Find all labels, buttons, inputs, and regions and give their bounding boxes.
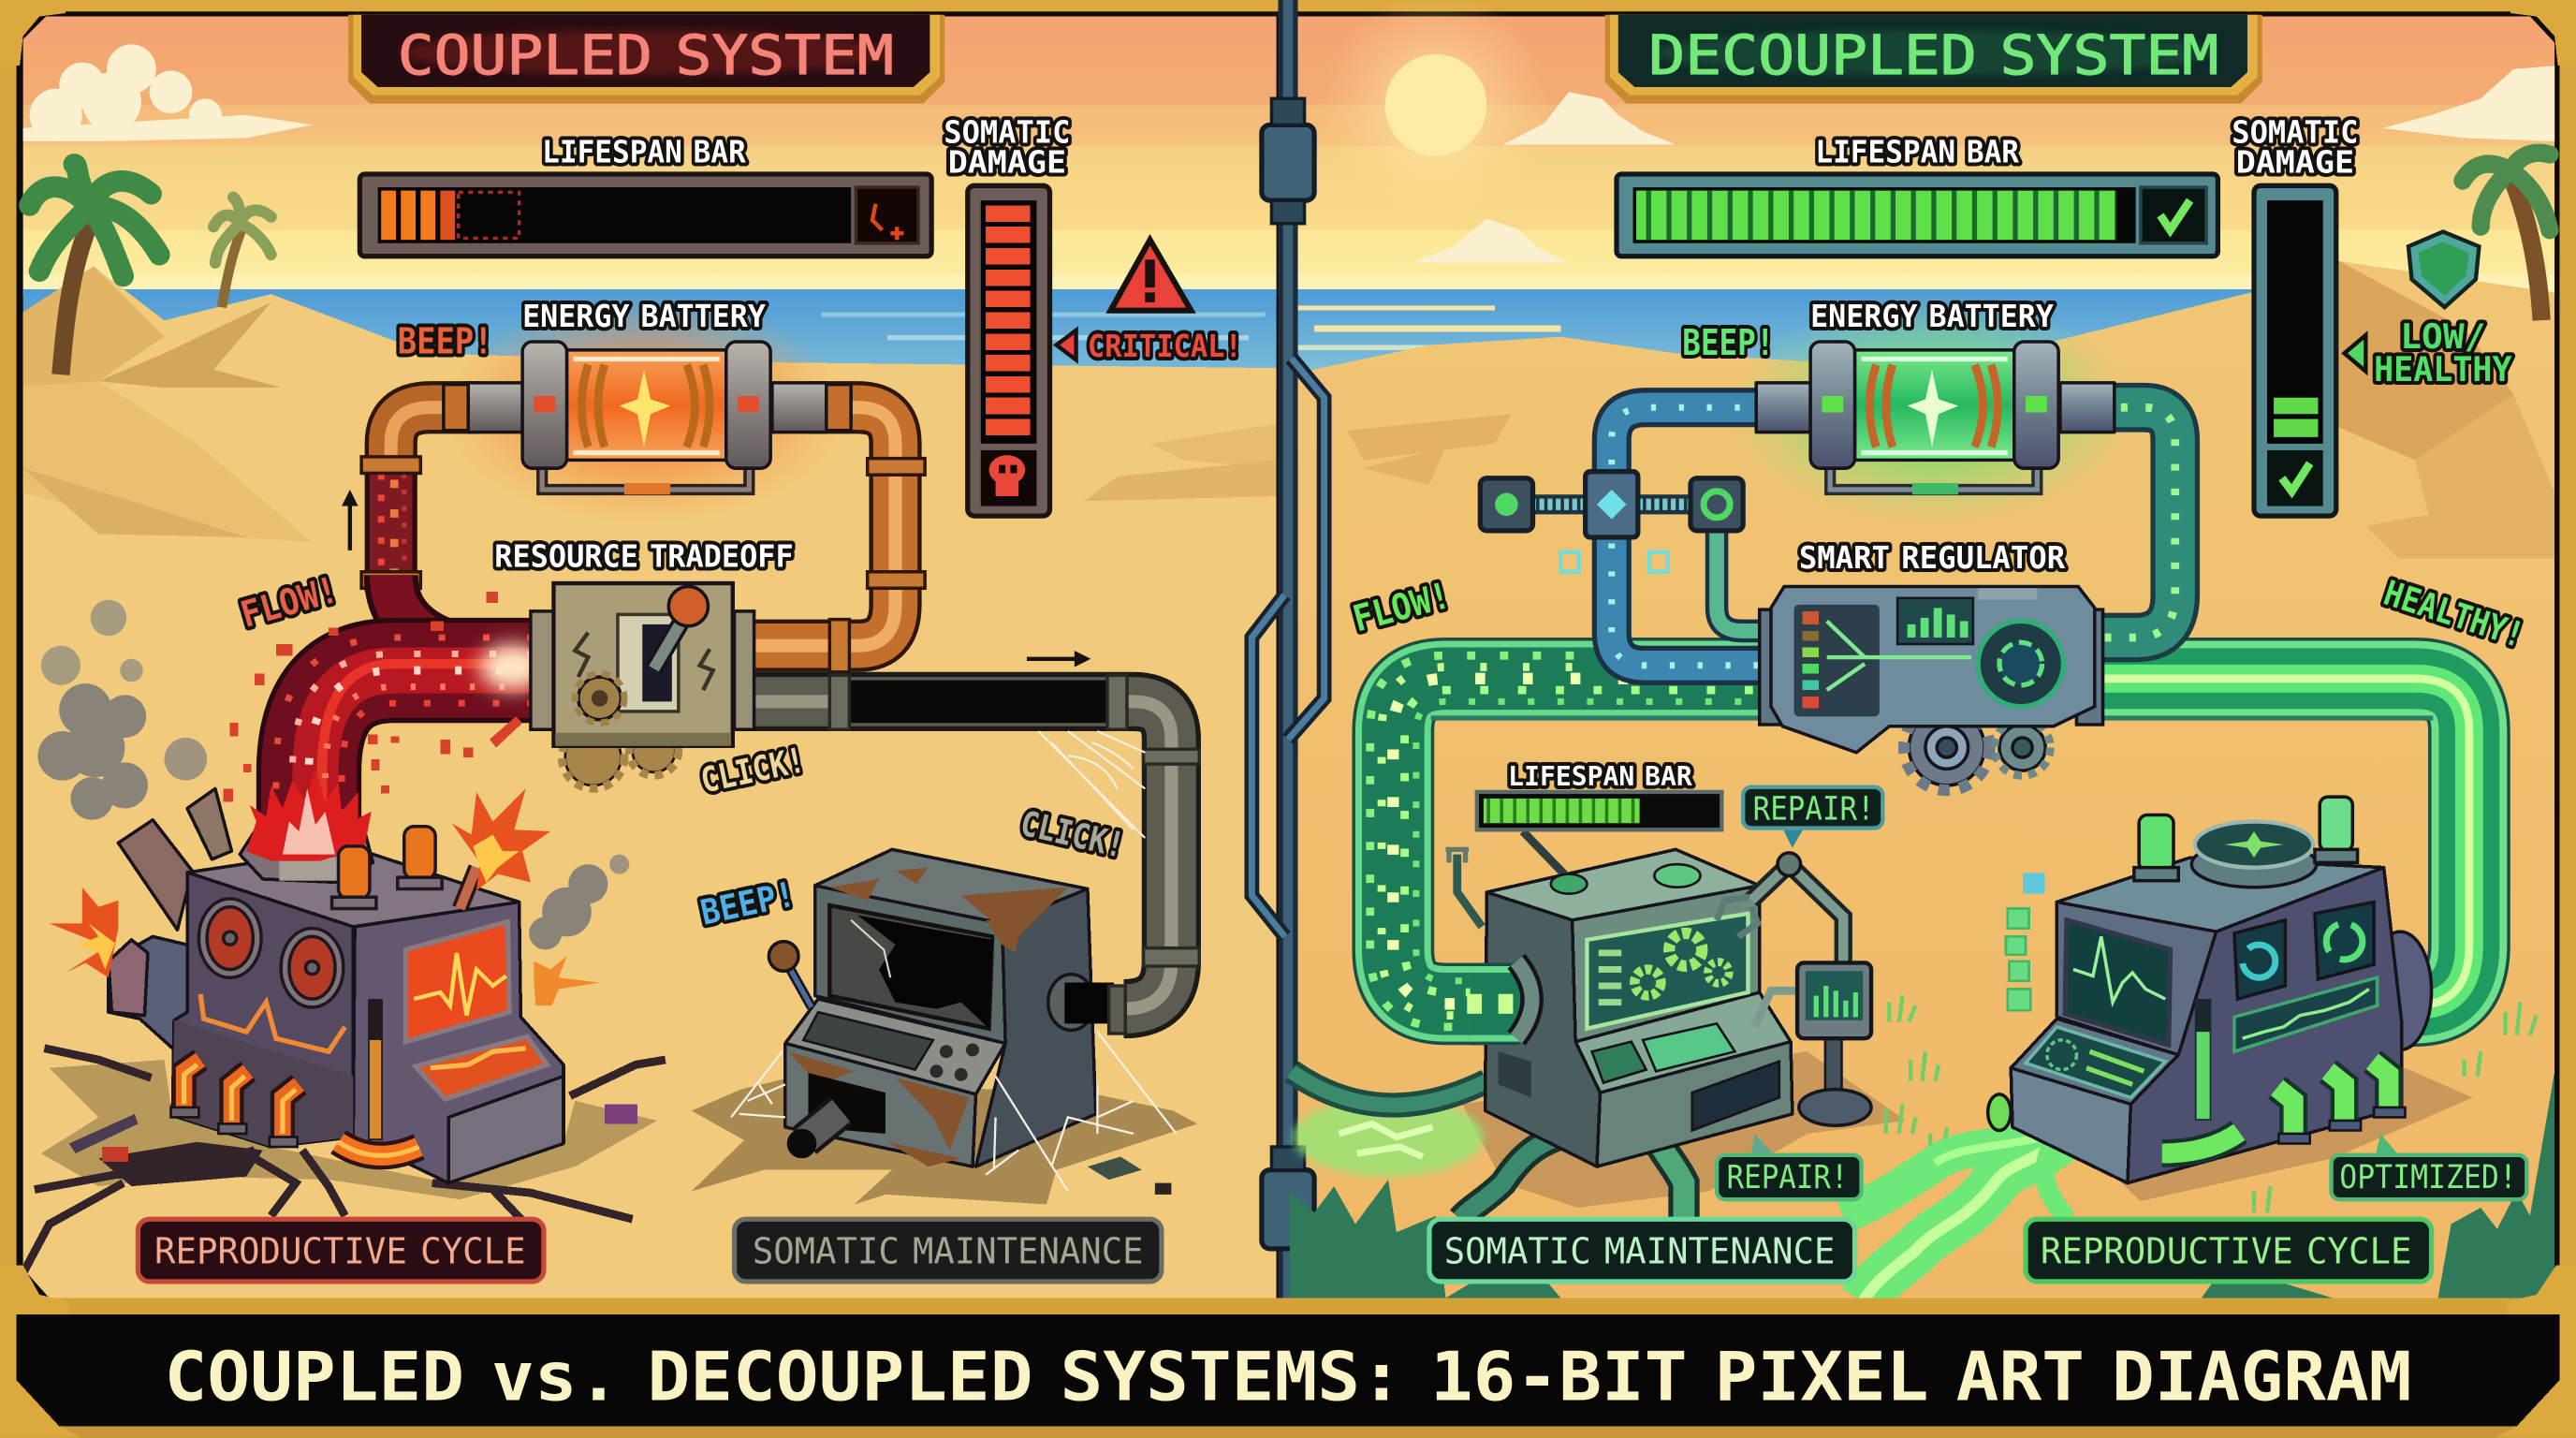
coolant droplets xyxy=(2006,874,2043,1010)
big green flow tube right xyxy=(2095,679,2469,1005)
lever xyxy=(788,966,812,1007)
repair arm xyxy=(1717,864,1843,1027)
coolant capsules xyxy=(2134,797,2358,881)
dark pipe to somatic machine xyxy=(753,675,1199,1009)
explosions xyxy=(452,788,550,890)
glowing seam xyxy=(200,994,345,1051)
onomatopoeia: click on switch: CLICK! xyxy=(697,740,809,801)
panel: decoupled system background xyxy=(1290,17,2558,1298)
icon: warning triangle xyxy=(1110,240,1191,311)
flying sparks xyxy=(224,592,522,801)
label: somatic damage right: SOMATIC xyxy=(2232,114,2358,151)
label: somatic damage left xyxy=(944,114,1070,180)
label: energy battery right: ENERGY BATTERY xyxy=(1810,298,2054,334)
label: lifespan bar left: LIFESPAN BAR xyxy=(542,134,747,170)
top fan xyxy=(2191,842,2317,888)
small lifespan bar: LIFESPAN BAR xyxy=(1508,761,1692,792)
grass tufts xyxy=(1290,1071,2554,1298)
cracked screen xyxy=(829,905,992,1029)
regulator nodes xyxy=(1480,472,1743,572)
hose feet xyxy=(2278,1108,2405,1143)
label: somatic maintenance left xyxy=(735,1219,1162,1282)
title: coupled system xyxy=(348,15,944,104)
big green flow tube left xyxy=(1370,655,1771,1027)
side vents xyxy=(1499,1051,1531,1097)
callout: critical: CRITICAL! xyxy=(1088,328,1242,364)
cobweb on pipe xyxy=(1038,731,1145,838)
opening and dead barrel xyxy=(809,1073,886,1134)
hot glow where flow exits the switch xyxy=(479,644,546,690)
machine: somatic maintenance, healthy xyxy=(1445,831,1871,1167)
monitor on stand xyxy=(1825,1038,1841,1101)
label: somatic maintenance right: SOMATIC MAINTENANCE xyxy=(1444,1231,1835,1273)
onomatopoeia: flow right: FLOW! xyxy=(1349,575,1455,640)
label: somatic damage right xyxy=(2232,114,2358,180)
label: resource tradeoff: RESOURCE TRADEOFF xyxy=(494,537,794,574)
icon: shield xyxy=(2408,231,2479,307)
copper pipes left xyxy=(381,407,896,646)
label: beep right: BEEP! xyxy=(1682,322,1775,364)
machine: reproductive cycle, healthy xyxy=(1988,797,2432,1183)
pipe collars left xyxy=(361,457,925,672)
onomatopoeia: click on pipe: CLICK! xyxy=(1017,803,1128,866)
label: somatic maintenance left: SOMATIC MAINTENANCE xyxy=(753,1231,1144,1273)
label: reproductive cycle right: REPRODUCTIVE CYCLE xyxy=(2041,1231,2411,1273)
gauge: somatic damage critical xyxy=(968,185,1050,516)
gauge: somatic damage low xyxy=(2254,185,2336,516)
banner: main title xyxy=(0,1298,2576,1426)
fan vents xyxy=(198,899,344,1007)
lifespan bar: coupled, nearly empty xyxy=(359,174,931,257)
hose stub on top xyxy=(460,868,476,909)
title: coupled system: COUPLED SYSTEM xyxy=(398,23,894,87)
arrow: up xyxy=(342,490,359,550)
debris bug xyxy=(1088,1157,1171,1195)
ground: right side shadows xyxy=(1462,1051,2472,1208)
flame jet at furnace mouth xyxy=(246,769,372,861)
ground shadow under somatic machine xyxy=(692,1079,1197,1204)
glowing hoses xyxy=(184,1060,419,1155)
machine: somatic maintenance, broken xyxy=(731,849,1177,1191)
title: decoupled system xyxy=(1605,15,2262,104)
title: decoupled system: DECOUPLED SYSTEM xyxy=(1648,23,2218,87)
banner: main title: COUPLED vs. DECOUPLED SYSTEMS: 16-BIT PIXEL ART DIAGRAM xyxy=(165,1337,2411,1416)
clouds xyxy=(23,44,2554,263)
callout: optimized xyxy=(2331,1134,2526,1199)
label: reproductive cycle left: REPRODUCTIVE CYCLE xyxy=(154,1231,526,1273)
label: smart regulator: SMART REGULATOR xyxy=(1799,539,2066,576)
capsules xyxy=(332,827,442,909)
battery: coupled xyxy=(444,342,851,494)
label: somatic maintenance right xyxy=(1429,1219,1855,1282)
hose feet xyxy=(171,1108,298,1147)
orange vital screen xyxy=(406,922,509,1042)
switch: resource tradeoff xyxy=(531,583,754,788)
icon: palm tree right xyxy=(2463,153,2550,320)
callout: low healthy: HEALTHY xyxy=(2374,349,2512,389)
label: reproductive cycle left xyxy=(138,1219,544,1282)
panel: coupled system background xyxy=(23,17,1280,1298)
label: reproductive cycle right xyxy=(2026,1219,2432,1282)
ground: cracked shadow under reproductive machine xyxy=(23,1049,666,1273)
icon: skull xyxy=(989,455,1025,496)
onomatopoeia: beep blue: BEEP! xyxy=(697,873,798,933)
callout: repair lower: REPAIR! xyxy=(1727,1158,1848,1196)
arrow: right xyxy=(1027,651,1090,668)
input port on side xyxy=(1048,975,1094,1030)
callout: low healthy: LOW/ xyxy=(2400,316,2485,357)
cobwebs xyxy=(731,1032,1177,1191)
leaked green stream and hoses xyxy=(1292,1071,2073,1301)
label: lifespan bar right: LIFESPAN BAR xyxy=(1815,134,2020,170)
callout: repair lower xyxy=(1717,1134,1862,1199)
energy glow right xyxy=(1727,296,2137,526)
callout: low healthy xyxy=(2345,316,2512,389)
scattered green sprouts xyxy=(1886,996,2537,1212)
hose port on side xyxy=(1516,961,1532,1038)
rust patches xyxy=(788,868,1068,1167)
energy glow left xyxy=(439,296,849,526)
label: beep left: BEEP! xyxy=(398,320,493,362)
small lifespan bar xyxy=(1477,761,1721,829)
icon: palm trees left xyxy=(30,165,271,374)
orange console xyxy=(416,1036,547,1099)
onomatopoeia: healthy: HEALTHY! xyxy=(2379,573,2529,655)
label: somatic damage right: DAMAGE xyxy=(2236,143,2354,180)
smoke clouds xyxy=(37,600,629,949)
icon: gauge check xyxy=(2282,463,2310,492)
inner loop lines under tubes xyxy=(1431,716,2433,719)
antenna arm xyxy=(1457,855,1482,927)
gears on screen xyxy=(1634,933,1729,996)
onomatopoeia: flow left: FLOW! xyxy=(237,569,343,637)
label: energy battery left: ENERGY BATTERY xyxy=(522,298,766,334)
label: somatic damage left: SOMATIC xyxy=(944,114,1070,151)
machine: reproductive cycle, coupled xyxy=(50,769,600,1183)
thermometer gauge xyxy=(368,999,383,1140)
machine: regulator xyxy=(1760,587,2103,790)
battery: decoupled xyxy=(1756,342,2115,494)
callout: repair upper: REPAIR! xyxy=(1753,790,1875,829)
control console xyxy=(1592,1042,1647,1083)
callout: optimized: OPTIMIZED! xyxy=(2339,1158,2517,1196)
stand connector xyxy=(1523,831,1569,879)
gears under switch xyxy=(565,729,675,785)
lifespan bar: decoupled, full xyxy=(1617,174,2217,257)
glowing hoses xyxy=(2162,1062,2389,1153)
callout: repair upper xyxy=(1743,787,1882,846)
divider: central pipe xyxy=(1251,0,1325,1301)
blue circuit pipes xyxy=(1531,407,2175,666)
green tube entering the side port xyxy=(1471,980,1519,1027)
icon: sun xyxy=(1321,0,1551,220)
label: somatic damage left: DAMAGE xyxy=(948,143,1066,180)
red energy flow tube xyxy=(276,575,534,846)
keyboard xyxy=(803,1012,933,1070)
